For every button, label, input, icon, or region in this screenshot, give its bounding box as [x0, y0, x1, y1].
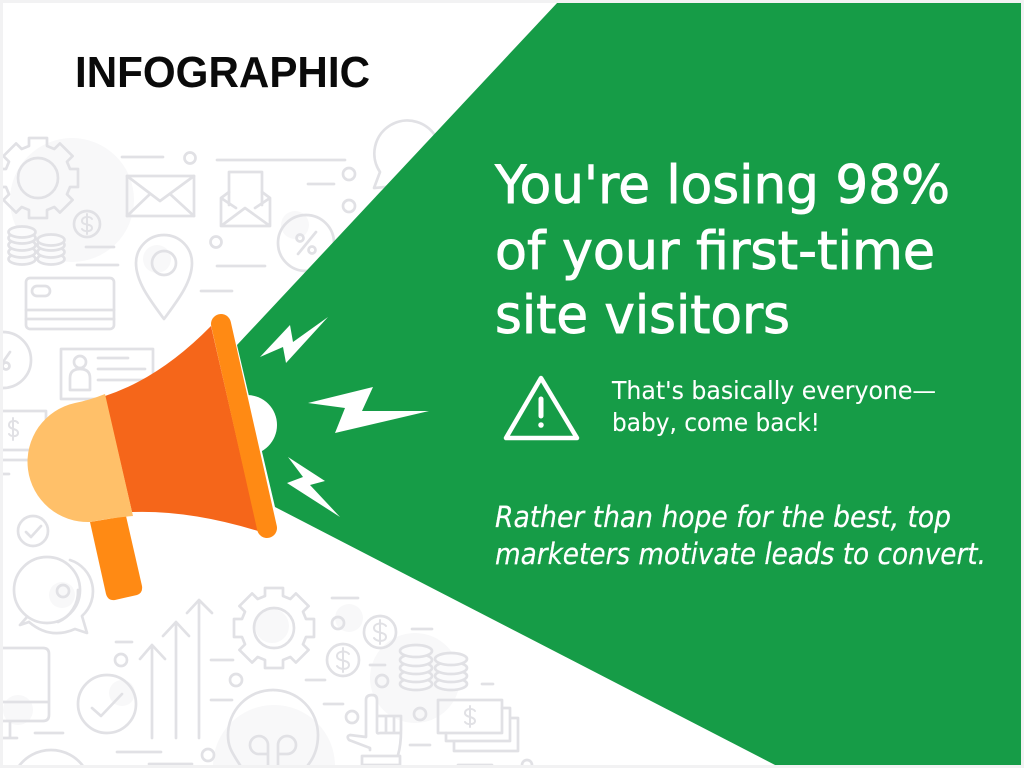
icon: lightning bolt top [260, 317, 328, 363]
icon: coin stacks bottom [400, 645, 467, 690]
panel: green megaphone beam [237, 2, 1022, 766]
subheading text: baby, come back! [612, 408, 820, 437]
background icon pattern [0, 121, 532, 766]
icon: gear top [0, 138, 78, 218]
heading [494, 155, 950, 346]
horn [105, 326, 258, 531]
icon: credit card [26, 278, 114, 329]
italic statement: marketers motivate leads to convert. [495, 537, 986, 571]
icon: id card [61, 349, 153, 399]
dashes and dots bottom [19, 598, 532, 766]
heading: of your first-time [495, 221, 935, 282]
italic statement [495, 500, 986, 571]
icon: growth arrows [140, 600, 212, 738]
icon: megaphone [28, 324, 277, 600]
icon: dollar coins bottom [327, 616, 396, 676]
icon: coin stacks [8, 226, 64, 264]
icon: double speech bubble [14, 557, 93, 633]
icon: open envelope [221, 172, 270, 226]
icon: check circle large [78, 675, 136, 733]
back cap [28, 394, 133, 522]
icon: check circle small [18, 516, 48, 546]
subheading text [611, 376, 936, 437]
heading: You're losing 98% [494, 155, 950, 216]
icon: banknotes [438, 700, 518, 751]
icon: speech bubble top [374, 121, 440, 188]
title: INFOGRAPHIC [75, 49, 370, 97]
icon: dollar coin [74, 211, 100, 237]
icon: dollar bill left [3, 411, 46, 474]
icon: pointing hand [348, 695, 401, 765]
icon: percent circle left [2, 332, 31, 388]
icon: envelope [127, 176, 194, 216]
icon: warning triangle [506, 378, 577, 438]
italic statement: Rather than hope for the best, top [495, 500, 951, 534]
subheading text: That's basically everyone— [611, 376, 936, 405]
heading: site visitors [495, 285, 790, 346]
icon: light bulb [228, 690, 318, 765]
icon: lightning bolt middle [308, 387, 429, 433]
sound circle [217, 395, 277, 455]
icon: gear bottom [234, 588, 314, 668]
rim [221, 324, 267, 528]
dashes and dots top [77, 152, 355, 291]
icon: percent circle [278, 215, 334, 271]
handle [90, 516, 142, 600]
icon: location pin [136, 235, 192, 319]
icon: lightning bolt bottom [287, 457, 340, 517]
icon: monitor [3, 648, 49, 738]
